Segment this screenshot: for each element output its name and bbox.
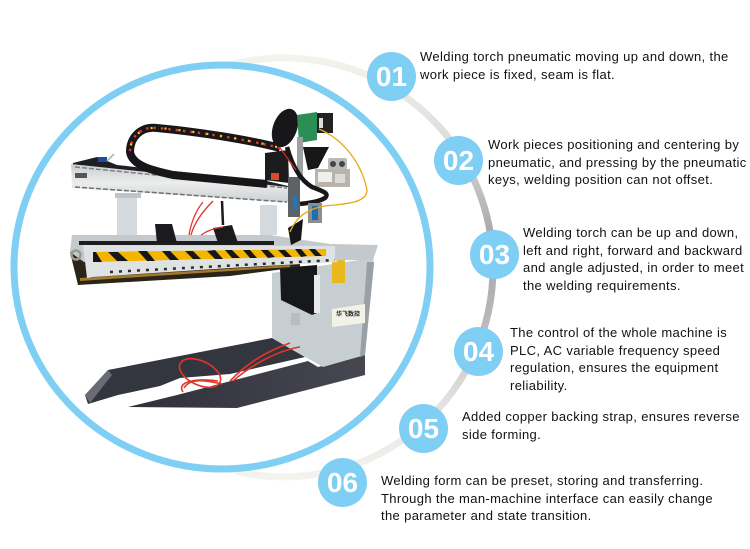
text 02 bbox=[488, 137, 747, 187]
badge 04: 04 bbox=[463, 336, 494, 367]
blue ring bbox=[14, 65, 430, 469]
badge 02 bbox=[434, 136, 483, 185]
text 01: Welding torch pneumatic moving up and down, the bbox=[420, 49, 729, 64]
badge 06: 06 bbox=[327, 467, 358, 498]
black slide panel bbox=[280, 265, 317, 315]
text 02: Work pieces positioning and centering by bbox=[488, 137, 739, 152]
badge 02: 02 bbox=[443, 145, 474, 176]
yellow warning label bbox=[332, 260, 345, 283]
red hoses bbox=[175, 343, 300, 393]
brand label: 华飞数控 bbox=[336, 310, 360, 318]
blue sensor bbox=[98, 157, 107, 162]
text 04: regulation, ensures the equipment bbox=[510, 360, 718, 375]
clamp keys row bbox=[110, 260, 335, 272]
yellow wire bbox=[290, 129, 367, 232]
text 04: reliability. bbox=[510, 378, 568, 393]
upper support legs bbox=[117, 197, 137, 235]
badge 01: 01 bbox=[376, 61, 407, 92]
long beam bbox=[72, 157, 288, 189]
badge 03: 03 bbox=[479, 239, 510, 270]
text 03 bbox=[523, 225, 744, 293]
base arms bbox=[85, 338, 365, 408]
badge 03 bbox=[470, 230, 519, 279]
control panel bbox=[315, 169, 350, 187]
text 03: the welding requirements. bbox=[523, 278, 681, 293]
text 03: and angle adjusted, in order to meet bbox=[523, 260, 744, 275]
gauges bbox=[328, 158, 347, 170]
text 06 bbox=[381, 473, 713, 523]
text 03: left and right, forward and backward bbox=[523, 243, 743, 258]
text 02: keys, welding position can not offset. bbox=[488, 172, 713, 187]
text 05: side forming. bbox=[462, 427, 541, 442]
red pipes bbox=[189, 201, 223, 235]
text 03: Welding torch can be up and down, bbox=[523, 225, 738, 240]
green circuit board bbox=[297, 112, 317, 143]
text 06: Through the man-machine interface can easily change bbox=[381, 491, 713, 506]
text 05 bbox=[462, 409, 740, 442]
badge 04 bbox=[454, 327, 503, 376]
clamps bbox=[155, 224, 177, 243]
torch carriage bbox=[288, 177, 300, 217]
vertical column bbox=[297, 137, 303, 177]
text 06: the parameter and state transition. bbox=[381, 508, 592, 523]
feeder box bbox=[317, 113, 333, 133]
text 06: Welding form can be preset, storing and transferring. bbox=[381, 473, 703, 488]
underside of beam bbox=[70, 252, 300, 285]
brand label bbox=[332, 304, 365, 327]
text 04: PLC, AC variable frequency speed bbox=[510, 343, 720, 358]
eye bolt bbox=[72, 250, 80, 260]
text 04 bbox=[510, 325, 727, 393]
badge 05: 05 bbox=[408, 413, 439, 444]
text 01 bbox=[420, 49, 729, 82]
red wires on head bbox=[280, 148, 296, 170]
text 04: The control of the whole machine is bbox=[510, 325, 727, 340]
cable chain bbox=[130, 128, 280, 184]
rear table bbox=[70, 235, 378, 262]
welding machine bbox=[70, 105, 378, 408]
badge 06 bbox=[318, 458, 367, 507]
gray arc bbox=[230, 58, 493, 477]
cabinet bbox=[272, 258, 374, 367]
wire spool disc bbox=[267, 105, 303, 151]
badge 05 bbox=[399, 404, 448, 453]
text 05: Added copper backing strap, ensures reverse bbox=[462, 409, 740, 424]
text 02: pneumatic, and pressing by the pneumatic bbox=[488, 155, 747, 170]
carriage box bbox=[265, 150, 289, 183]
text 01: work piece is fixed, seam is flat. bbox=[420, 67, 615, 82]
hazard stripe bbox=[93, 249, 326, 262]
front beam bbox=[83, 245, 338, 278]
badge 01 bbox=[367, 52, 416, 101]
torch bbox=[288, 219, 303, 245]
